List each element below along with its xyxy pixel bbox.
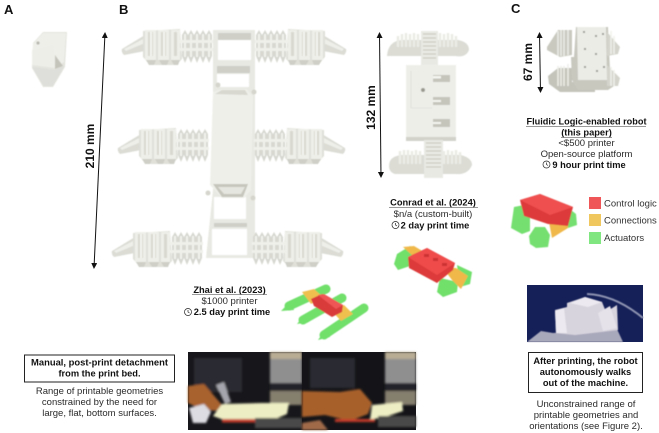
text: unconstrained range (529, 399, 643, 432)
callout: autonomous walk-out (528, 352, 642, 392)
icon: clock (543, 161, 550, 168)
photo: robot walking out (527, 285, 643, 342)
caption: Fluidic Logic-enabled robot: Fluidic Logic-enabled robot (526, 116, 646, 126)
actuators row 2 (118, 128, 345, 164)
legend: control logic: Control logic (604, 198, 657, 210)
legend (589, 197, 657, 244)
text: unconstrained range: orientations (see Figure 2). (529, 421, 643, 432)
actuators row 3 (112, 231, 343, 267)
icon: clock (184, 308, 192, 316)
dimension arrow 210 mm: 210 mm (83, 124, 97, 168)
legend: connections: Connections (604, 216, 657, 226)
dimension arrow 132 mm: 132 mm (364, 85, 378, 130)
text: range of printable geometries: Range of printable geometries (36, 386, 163, 397)
caption: Fluidic Logic-enabled robot: 9 hour print time (552, 160, 626, 170)
caption: Conrad et al.: $n/a (custom-built) (394, 209, 472, 220)
caption: Conrad et al.: 2 day print time (401, 220, 469, 230)
caption: Zhai et al. (184, 285, 270, 317)
robot B: Zhai et al. render (112, 29, 346, 267)
robot C render (547, 27, 620, 92)
colored robot: Conrad (394, 246, 472, 297)
caption: Fluidic Logic-enabled robot: <$500 printer (558, 138, 615, 149)
caption: Conrad et al. (389, 198, 478, 230)
caption: Zhai et al.: $1000 printer (202, 296, 257, 307)
caption: Zhai et al.: 2.5 day print time (194, 307, 270, 317)
robot Conrad et al. render (387, 31, 472, 178)
caption: Conrad et al.: Conrad et al. (2024) (390, 198, 476, 208)
dimension arrow 67 mm: 67 mm (521, 43, 535, 81)
icon: clock (392, 222, 399, 228)
text: range of printable geometries (36, 386, 163, 419)
caption: Fluidic Logic-enabled robot: Open-source platform (541, 149, 633, 160)
legend: actuators: Actuators (604, 233, 644, 244)
colored robot: C (511, 194, 577, 248)
text: range of printable geometries: large, flat, bottom surfaces. (42, 408, 157, 419)
callout: manual detachment (24, 355, 174, 382)
callout: autonomous walk-out: After printing, the robot (533, 356, 638, 366)
text: range of printable geometries: constrained by the need for (42, 397, 157, 408)
callout: autonomous walk-out: out of the machine. (543, 378, 628, 388)
center frame (206, 30, 256, 258)
callout: manual detachment: Manual, post-print detachment (31, 358, 168, 368)
colored robot: Zhai (281, 289, 364, 340)
caption: Fluidic Logic-enabled robot: (this paper) (561, 128, 612, 138)
caption: Fluidic Logic-enabled robot (526, 116, 646, 170)
actuators row 1 (122, 29, 346, 65)
photo: scraping robot (302, 352, 416, 430)
text: unconstrained range: Unconstrained range of (537, 399, 636, 410)
panel label B: B (119, 2, 128, 17)
dimension arrow 210 mm (83, 33, 105, 268)
photo: spraying robot (188, 352, 302, 430)
panel label A: A (4, 2, 14, 17)
callout: manual detachment: from the print bed. (58, 368, 141, 378)
text: unconstrained range: printable geometries and (534, 410, 638, 421)
robot A render (32, 32, 67, 87)
panel label C: C (511, 1, 521, 16)
caption: Zhai et al.: Zhai et al. (2023) (193, 285, 266, 295)
callout: autonomous walk-out: autonomously walks (540, 367, 631, 377)
dimension arrow 67 mm (521, 33, 540, 92)
